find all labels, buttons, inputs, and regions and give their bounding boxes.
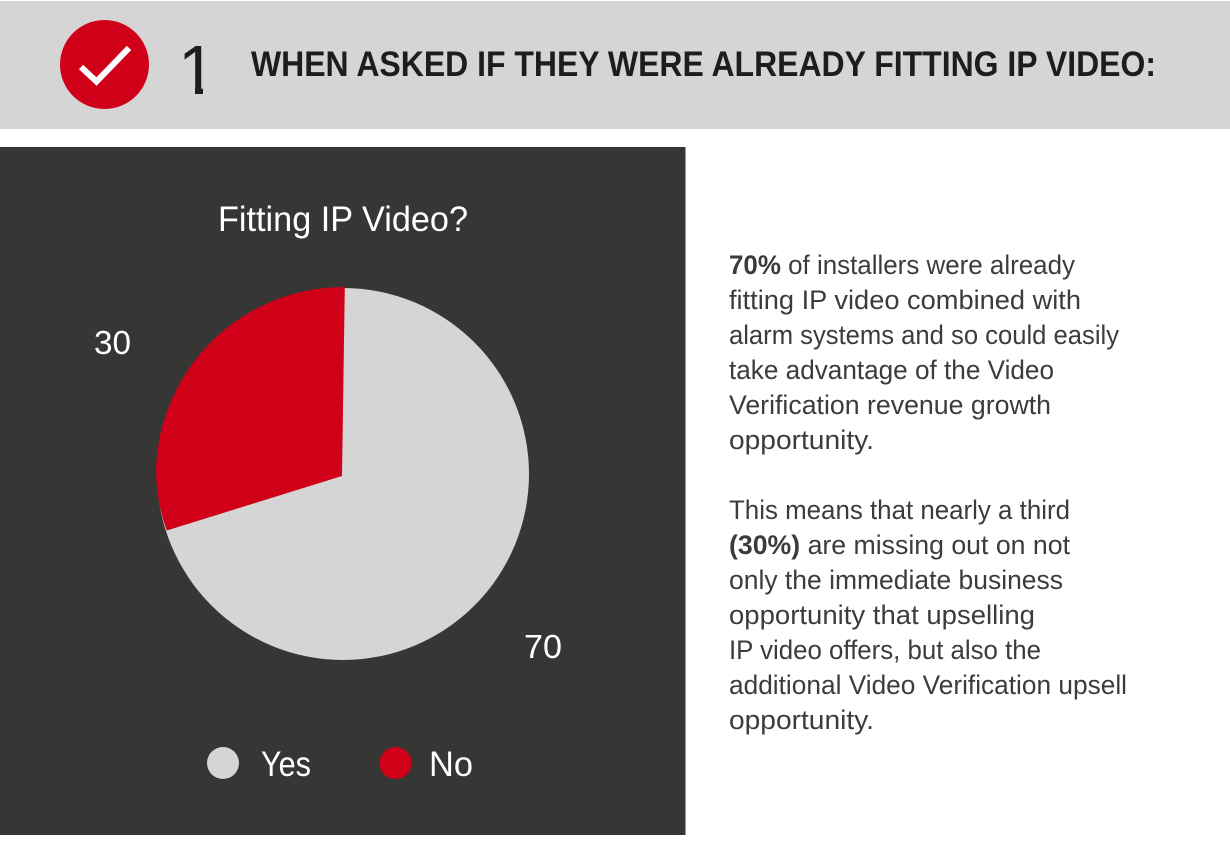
text block: 70% paragraph: take advantage of the Video [729, 355, 1054, 385]
header band [0, 1, 1230, 129]
legend item: Yes: Yes [261, 745, 311, 784]
legend item: No: No [429, 745, 473, 784]
text block: 70% paragraph: 70% of installers were already [729, 250, 1075, 280]
text block: 30% paragraph: IP video offers, but also the [729, 635, 1041, 665]
text block: 30% paragraph: opportunity that upselling [729, 600, 1035, 630]
legend [207, 745, 473, 784]
text block: 70% paragraph: opportunity. [729, 425, 874, 455]
text block: 30% paragraph: opportunity. [729, 705, 874, 735]
text block: 30% paragraph: This means that nearly a third [729, 495, 1070, 525]
panel: pie chart [0, 147, 686, 835]
text block: 30% paragraph [729, 495, 1127, 735]
data label: 30: 30 [94, 324, 131, 361]
section number: 1 [178, 31, 216, 109]
text block: 70% paragraph: fitting IP video combined with [729, 285, 1081, 315]
text block: 30% paragraph: additional Video Verification upsell [729, 670, 1127, 700]
text block: 70% paragraph [729, 250, 1119, 455]
title: WHEN ASKED IF THEY WERE ALREADY FITTING IP VIDEO: [251, 45, 1156, 84]
pie chart [156, 287, 529, 660]
text block: 70% paragraph: Verification revenue growth [729, 390, 1051, 420]
data label: 70: 70 [524, 628, 562, 665]
icon: red check badge [60, 20, 149, 109]
legend item: No [380, 745, 473, 784]
text block: 30% paragraph: only the immediate business [729, 565, 1063, 595]
text block: 70% paragraph: alarm systems and so could easily [729, 320, 1119, 350]
legend item: Yes [207, 745, 311, 784]
text block: 30% paragraph: (30%) are missing out on not [729, 530, 1070, 560]
chart title: Fitting IP Video? [218, 200, 468, 239]
